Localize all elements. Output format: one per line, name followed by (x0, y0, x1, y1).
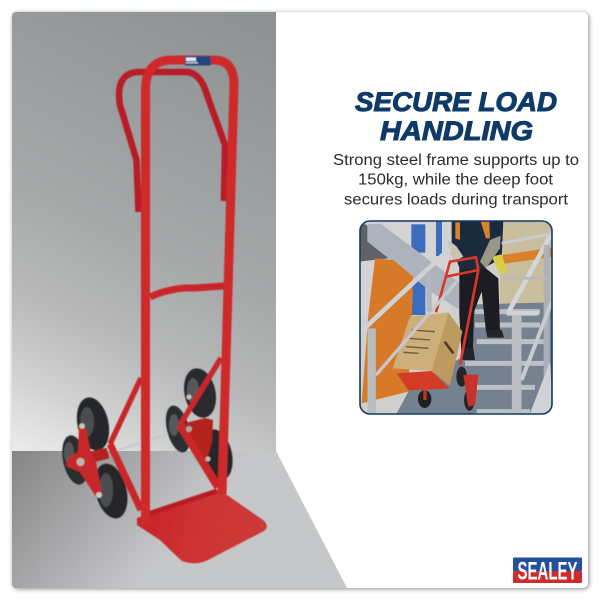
worker torso (452, 220, 503, 270)
photo: worker moving a box down stairs (358, 220, 553, 417)
worker legs (459, 265, 500, 358)
axle rod (118, 432, 175, 450)
main tubular frame (146, 60, 234, 524)
heading: secure load handling: HANDLING (380, 116, 533, 146)
right railings (508, 233, 552, 312)
ceiling underside (360, 224, 388, 262)
stairs (395, 302, 553, 417)
left railings (363, 248, 450, 330)
hi-vis vest accents (455, 222, 490, 240)
orange louvre panel (362, 258, 413, 403)
text block: description: secures loads during transport (344, 192, 569, 208)
text block: description: Strong steel frame supports up to (333, 152, 579, 169)
orange pallet beam (503, 247, 553, 264)
stair treads (465, 312, 547, 412)
trolley base and wheels (397, 371, 449, 390)
panel: product photo backdrop (12, 12, 347, 588)
text block: description (333, 152, 579, 208)
cardboard stacks background (500, 220, 553, 305)
rear handle (119, 72, 225, 212)
steel stringer (367, 224, 460, 310)
frame struts (110, 378, 141, 510)
brand label on handle (185, 56, 211, 66)
blue windows (411, 221, 442, 315)
box print lines (403, 330, 435, 353)
background wall left (358, 220, 450, 315)
icon: stair climber hand truck (58, 56, 267, 563)
left wheel cluster (58, 394, 133, 522)
worker boots (462, 330, 504, 360)
foot plate (137, 490, 267, 563)
heading: secure load handling: SECURE LOAD (355, 87, 557, 117)
cross bar (150, 286, 224, 297)
hand truck frame in photo (436, 257, 478, 365)
right wheel cluster (162, 358, 237, 487)
heading: secure load handling (355, 87, 557, 146)
cardboard box (393, 312, 448, 371)
worker arm sleeve and glove (480, 236, 501, 268)
text block: description: 150kg, while the deep foot (358, 172, 554, 188)
